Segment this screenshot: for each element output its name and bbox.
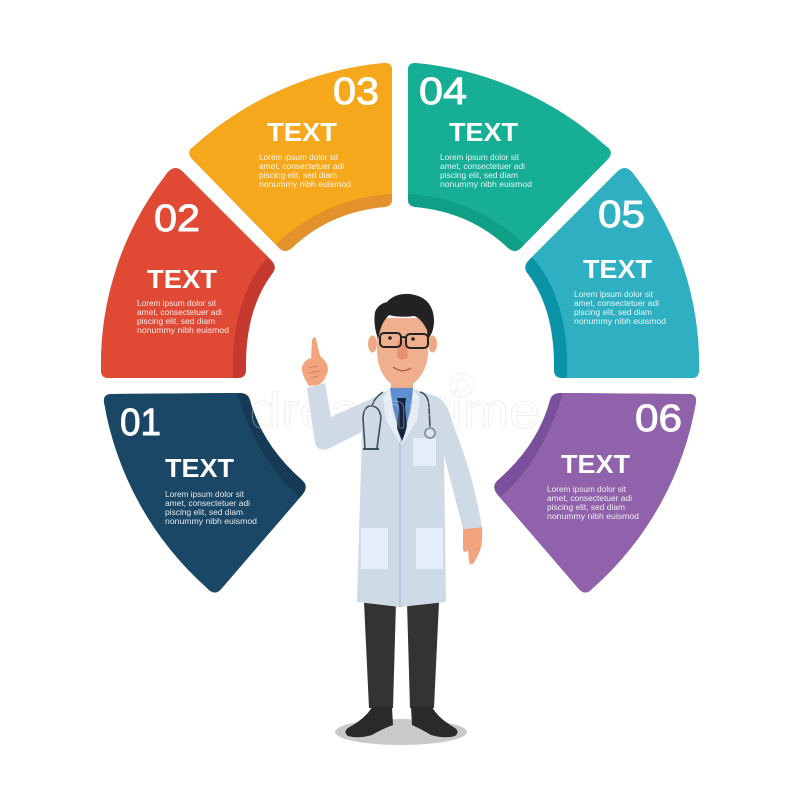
tie bbox=[397, 398, 407, 441]
panel: segment 01: amet, consectetuer adi bbox=[165, 499, 250, 508]
panel: segment 01: piscing elit, sed diam bbox=[165, 508, 243, 517]
panel: segment 02: Lorem ipsum dolor sit bbox=[137, 299, 217, 308]
panel: segment 03: TEXT bbox=[267, 117, 337, 147]
panel: segment 01 bbox=[104, 393, 306, 592]
pockets bbox=[361, 438, 443, 569]
panel: segment 06: 06 bbox=[635, 398, 682, 440]
panel: segment 02: nonummy nibh euismod bbox=[137, 326, 229, 335]
face bbox=[377, 318, 428, 387]
panel: segment 06: amet, consectetuer adi bbox=[547, 494, 632, 503]
mouth bbox=[393, 367, 411, 371]
panel: segment 04 bbox=[408, 63, 611, 251]
raised hand bbox=[302, 337, 328, 386]
panel: segment 01: TEXT bbox=[165, 453, 234, 483]
panel: segment 03: amet, consectetuer adi bbox=[259, 162, 344, 171]
right hand bbox=[463, 527, 482, 564]
panel: segment 03: 03 bbox=[333, 71, 379, 113]
panel: segment 06: piscing elit, sed diam bbox=[547, 503, 625, 512]
panel: segment 06 bbox=[494, 393, 696, 592]
panel: segment 01: Lorem ipsum dolor sit bbox=[165, 490, 245, 499]
panel: segment 02: amet, consectetuer adi bbox=[137, 308, 222, 317]
panel: segment 02: piscing elit, sed diam bbox=[137, 317, 215, 326]
panel: segment 01: 01 bbox=[120, 402, 161, 444]
stethoscope bbox=[363, 392, 435, 449]
panel: segment 04: 04 bbox=[419, 71, 467, 113]
glasses bbox=[380, 333, 428, 348]
watermark: dreamstime bbox=[250, 383, 540, 439]
coat bbox=[307, 383, 482, 607]
panel: segment 05: piscing elit, sed diam bbox=[574, 308, 652, 317]
panel: segment 05: 05 bbox=[598, 194, 645, 236]
panel: segment 03 bbox=[189, 63, 392, 251]
panel: segment 05: TEXT bbox=[583, 254, 652, 284]
nose bbox=[397, 340, 408, 360]
eyes bbox=[388, 336, 415, 341]
panel: segment 03: nonummy nibh euismod bbox=[259, 180, 351, 189]
panel: segment 04: Lorem ipsum dolor sit bbox=[440, 153, 520, 162]
panel: segment 04: nonummy nibh euismod bbox=[440, 180, 532, 189]
hair bbox=[374, 294, 434, 339]
panel: segment 04: TEXT bbox=[449, 117, 518, 147]
panel: segment 05 bbox=[525, 168, 699, 378]
panel: segment 06: nonummy nibh euismod bbox=[547, 512, 639, 521]
panel: segment 02 bbox=[101, 168, 275, 378]
neck bbox=[391, 372, 413, 402]
panel: segment 05: nonummy nibh euismod bbox=[574, 317, 666, 326]
panel: segment 03: piscing elit, sed diam bbox=[259, 171, 337, 180]
panel: segment 03: Lorem ipsum dolor sit bbox=[259, 153, 339, 162]
ears bbox=[368, 336, 437, 352]
illustration: doctor bbox=[302, 294, 482, 745]
panel: segment 02: TEXT bbox=[147, 264, 217, 294]
shirt collar bbox=[390, 388, 413, 441]
panel: segment 02: 02 bbox=[154, 198, 200, 240]
panel: segment 04: piscing elit, sed diam bbox=[440, 171, 518, 180]
panel: segment 06: TEXT bbox=[561, 449, 630, 479]
lapels bbox=[383, 389, 420, 445]
floor shadow bbox=[335, 719, 467, 745]
panel: segment 01: nonummy nibh euismod bbox=[165, 517, 257, 526]
panel: segment 04: amet, consectetuer adi bbox=[440, 162, 525, 171]
panel: segment 06: Lorem ipsum dolor sit bbox=[547, 485, 627, 494]
panel: segment 05: amet, consectetuer adi bbox=[574, 299, 659, 308]
shoes bbox=[346, 707, 458, 737]
trousers bbox=[364, 602, 439, 708]
panel: segment 05: Lorem ipsum dolor sit bbox=[574, 290, 654, 299]
